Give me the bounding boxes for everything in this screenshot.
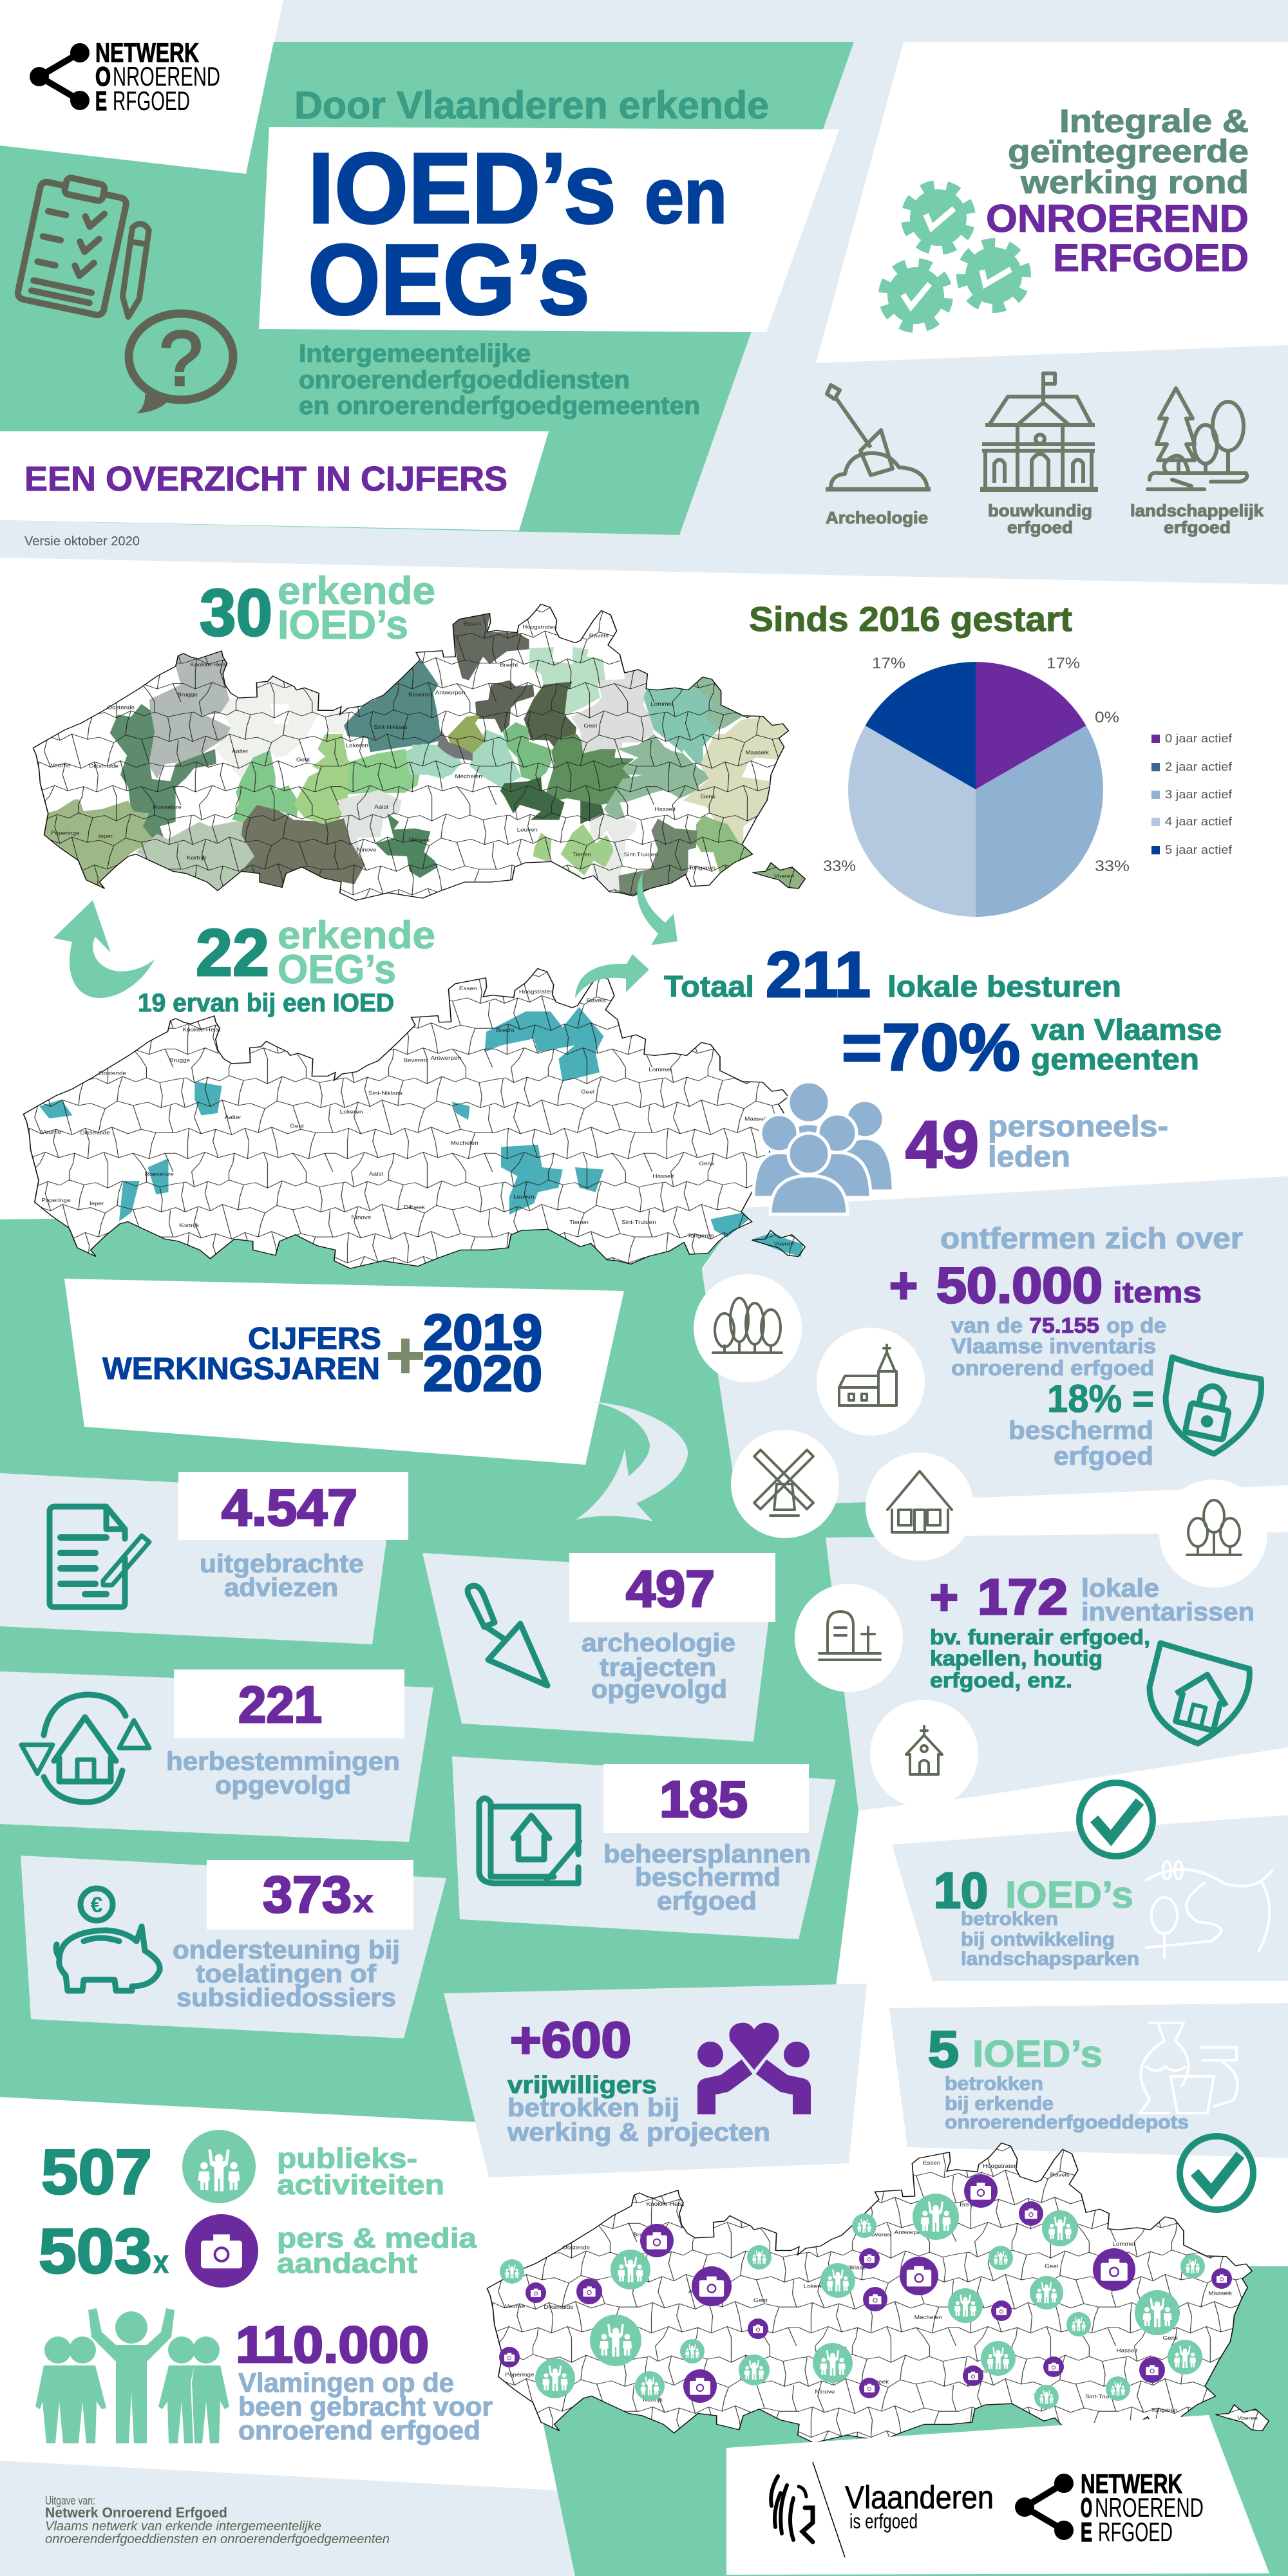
panel: 221 herbestemmingen: 221: [238, 1676, 322, 1733]
icon: pottery: [1140, 2023, 1238, 2113]
panel: 10 IOED's landschapsparken: IOED’s: [1005, 1874, 1133, 1916]
stat: 172 lokale inventarissen: bv. funerair erfgoed,: [930, 1625, 1150, 1649]
icon: shield with house: [1150, 1643, 1249, 1744]
text: ontfermen zich over 50.000 items: [889, 1221, 1243, 1471]
stat: 507 publieksactiviteiten: [41, 2130, 444, 2207]
chart legend: [1151, 732, 1233, 856]
icon: house with recycling arrows: [21, 1695, 149, 1802]
heading: sinds 2016 gestart: Sinds 2016 gestart: [749, 600, 1072, 639]
text: uitgave credits: Netwerk Onroerend Erfgoed: [45, 2505, 227, 2521]
panel: 497 archeologie: archeologie: [582, 1629, 735, 1657]
panel: green backdrop of cijfers section: [0, 1210, 902, 2122]
text: ontfermen zich over 50.000 items: Vlaamse inventaris: [951, 1334, 1156, 1358]
icon: document with pen: [50, 1507, 149, 1607]
stat: 507 publieksactiviteiten: publieks-: [277, 2143, 417, 2174]
stat: 70% van Vlaamse gemeenten: =70%: [842, 1010, 1020, 1084]
text: uitgave credits: onroerenderfgoeddiensten en onroerenderfgoedgemeenten: [45, 2532, 390, 2546]
text: erfgoed categories: [826, 501, 1264, 537]
text: ontfermen zich over 50.000 items: 18% =: [1047, 1377, 1154, 1420]
heading: 22 erkende OEG's: [138, 914, 435, 1017]
panel: 185 beheersplannen: [452, 1756, 836, 1939]
panel: 5 IOED's depots: 5: [928, 2020, 959, 2078]
panel: 185 beheersplannen: beschermd: [635, 1863, 781, 1892]
panel: 5 IOED's depots: onroerenderfgoeddepots: [945, 2112, 1189, 2133]
text: uitgave credits: Vlaams netwerk van erkende intergemeentelijke: [45, 2519, 321, 2534]
stat: 110.000 Vlamingen: Vlamingen op de: [238, 2367, 454, 2398]
panel: 10 IOED's landschapsparken: betrokken: [961, 1908, 1058, 1930]
panel: 373x ondersteuning: ondersteuning bij: [173, 1936, 400, 1964]
logo: Netwerk Onroerend Erfgoed bottom: NETWERK: [1081, 2468, 1182, 2499]
stat: 172 lokale inventarissen: erfgoed, enz.: [930, 1668, 1072, 1692]
panel: 5 IOED's depots: [889, 2003, 1288, 2158]
pins: pers en media: [499, 2174, 1232, 2403]
icon: check in ring: [1180, 2136, 1253, 2210]
text: integrale werking: geïntegreerde: [1008, 133, 1249, 169]
panel: 10 IOED's landschapsparken: [892, 1815, 1288, 1981]
icon: check in ring: [1079, 1783, 1153, 1856]
text: ontfermen zich over 50.000 items: 75.155: [1029, 1313, 1099, 1337]
stat: 172 lokale inventarissen: +: [930, 1568, 958, 1625]
icon: shield with lock: [1166, 1357, 1262, 1454]
panel: 185 beheersplannen: erfgoed: [657, 1887, 757, 1915]
stat: totaal 211 lokale besturen: 211: [766, 939, 871, 1011]
stat: 172 lokale inventarissen: inventarissen: [1081, 1598, 1255, 1626]
logo: Vlaanderen is erfgoed: [771, 2462, 994, 2557]
heading: een overzicht in cijfers: EEN OVERZICHT IN CIJFERS: [24, 460, 507, 498]
stat: 110.000 Vlamingen: 110.000: [236, 2316, 429, 2373]
arrow: curved up left: [53, 900, 155, 998]
heading: 22 erkende OEG's: OEG’s: [278, 947, 396, 992]
panel: 497 archeologie: [422, 1553, 775, 1742]
chart: pie sinds 2016 gestart: 0%: [1095, 709, 1119, 726]
text: erfgoed categories: landschappelijk: [1130, 501, 1264, 520]
title: IOED's en OEG's: IOED’s: [308, 133, 616, 245]
pins: publieksactiviteiten: [500, 2194, 1205, 2409]
panel: 221 herbestemmingen: opgevolgd: [215, 1771, 351, 1800]
text: uitgave credits: Uitgave van:: [45, 2494, 95, 2507]
stat: totaal 211 lokale besturen: Totaal: [664, 970, 754, 1003]
stat: totaal 211 lokale besturen: [664, 939, 1121, 1011]
title: IOED's en OEG's: [308, 133, 727, 336]
icon: bouwkundig erfgoed building: [980, 373, 1098, 489]
panel: 10 IOED's landschapsparken: bij ontwikkeling: [961, 1929, 1115, 1950]
icon circle: grave: [795, 1584, 903, 1692]
panel: logos white box: [726, 2415, 1269, 2575]
icon: pencil: [120, 223, 149, 318]
panel: cijfers werkingsjaren: [64, 1279, 624, 1465]
icon: landschappelijk erfgoed trees: [1148, 388, 1247, 489]
icon: people cheering: [35, 2308, 229, 2443]
map: activiteiten en pers: [480, 2138, 1278, 2446]
subtitle: intergemeentelijke diensten: Intergemeentelijke: [299, 340, 531, 368]
arrow: curved down right: [637, 871, 677, 945]
text: erfgoed categories: erfgoed: [1007, 518, 1073, 537]
panel: 221 herbestemmingen: [0, 1669, 433, 1842]
subtitle: intergemeentelijke diensten: en onroerenderfgoedgemeenten: [299, 392, 700, 420]
text: ontfermen zich over 50.000 items: ontfermen zich over: [940, 1221, 1243, 1255]
panel: lokale inventarissen backdrop: [826, 1532, 1288, 1810]
panel: main title white box: [259, 127, 839, 332]
icon: blueprint with house: [479, 1798, 580, 1883]
icon: group of people: [753, 1082, 893, 1214]
subtitle: intergemeentelijke diensten: onroerenderfgoeddiensten: [299, 366, 630, 394]
icon circle: church: [817, 1328, 925, 1436]
icon circle: chapel: [870, 1700, 978, 1808]
panel: 5 IOED's depots: bij erkende: [945, 2093, 1054, 2114]
stat: totaal 211 lokale besturen: lokale besturen: [887, 970, 1121, 1003]
panel: 600 vrijwilligers: +600: [510, 2011, 631, 2068]
text: ontfermen zich over 50.000 items: erfgoed: [1054, 1442, 1153, 1471]
logo: Netwerk Onroerend Erfgoed top: O: [95, 61, 111, 91]
logo: Netwerk Onroerend Erfgoed top: RFGOED: [113, 86, 190, 116]
panel: 10 IOED's landschapsparken: landschapsparken: [961, 1948, 1139, 1970]
chart: pie sinds 2016 gestart: 17%: [872, 655, 905, 672]
chart legend: 4 jaar actief: [1165, 815, 1233, 828]
panel: 600 vrijwilligers: werking & projecten: [507, 2118, 770, 2147]
logo: Netwerk Onroerend Erfgoed bottom: E: [1081, 2517, 1092, 2547]
panel: bottom-right green: [535, 2266, 1288, 2576]
panel: 373x ondersteuning: 373: [263, 1866, 352, 1923]
icon circle: trees: [694, 1274, 802, 1382]
stat: 503x pers en media: [39, 2214, 477, 2288]
chart: pie sinds 2016 gestart: 33%: [1095, 858, 1130, 875]
stat: 507 publieksactiviteiten: 507: [41, 2136, 152, 2207]
text: versie: Versie oktober 2020: [24, 534, 140, 549]
icon: clipboard with checklist: [17, 172, 129, 316]
panel: light blue items backdrop: [702, 1176, 1288, 1503]
heading: 22 erkende OEG's: 19 ervan bij een IOED: [138, 989, 394, 1017]
panel: 373x ondersteuning: toelatingen of: [196, 1960, 377, 1988]
logo: Netwerk Onroerend Erfgoed bottom: NROEREND: [1095, 2492, 1204, 2523]
logo: Netwerk Onroerend Erfgoed bottom: RFGOED: [1098, 2517, 1173, 2547]
text: ontfermen zich over 50.000 items: op de: [1106, 1313, 1166, 1337]
icon circle: house: [866, 1453, 974, 1561]
logo: Netwerk Onroerend Erfgoed top: NROEREND: [113, 61, 220, 91]
logo: Netwerk Onroerend Erfgoed top: NETWERK: [95, 37, 199, 68]
text: ontfermen zich over 50.000 items: onroerend erfgoed: [951, 1356, 1154, 1380]
panel: 373x ondersteuning: [21, 1856, 446, 2038]
panel: 5 IOED's depots: IOED’s: [972, 2033, 1103, 2075]
logo: Netwerk Onroerend Erfgoed top: [30, 37, 220, 116]
stat: 49 personeelsleden: 49: [905, 1107, 979, 1181]
panel: 185 beheersplannen: 185: [659, 1771, 748, 1828]
panel: 600 vrijwilligers: [444, 1984, 867, 2177]
icon: landscape road: [1146, 1861, 1272, 1957]
stat: 503x pers en media: 503: [39, 2215, 152, 2286]
chart legend: 2 jaar actief: [1165, 760, 1233, 773]
panel: cijfers werkingsjaren: CIJFERS: [248, 1322, 381, 1356]
stat: 70% van Vlaamse gemeenten: gemeenten: [1031, 1042, 1199, 1076]
title: IOED's en OEG's: en: [645, 152, 727, 240]
stat: 49 personeelsleden: personeels-: [988, 1109, 1168, 1143]
icon: hands holding heart: [697, 2023, 810, 2114]
chart legend: 5 jaar actief: [1165, 843, 1233, 856]
text: erfgoed categories: bouwkundig: [988, 501, 1092, 520]
title: IOED's en OEG's: OEG’s: [308, 224, 590, 336]
panel: 600 vrijwilligers: vrijwilligers: [507, 2072, 657, 2099]
heading: 30 erkende IOED's: 30: [200, 576, 272, 650]
heading: 30 erkende IOED's: erkende: [278, 569, 435, 612]
panel: 600 vrijwilligers: betrokken bij: [507, 2094, 679, 2122]
text: integrale werking: Integrale &: [1059, 103, 1249, 139]
heading: 22 erkende OEG's: erkende: [278, 914, 435, 957]
panel: cijfers werkingsjaren: 2019: [423, 1304, 542, 1360]
text: integrale werking: [986, 103, 1249, 279]
chart: pie sinds 2016 gestart: 33%: [823, 858, 856, 875]
stat: 70% van Vlaamse gemeenten: van Vlaamse: [1031, 1013, 1222, 1046]
stat: 507 publieksactiviteiten: activiteiten: [277, 2169, 444, 2201]
panel: integrale werking white box: [816, 42, 1288, 363]
stat: 70% van Vlaamse gemeenten: [842, 1010, 1222, 1084]
heading: 30 erkende IOED's: IOED’s: [278, 603, 408, 648]
text: ontfermen zich over 50.000 items: +: [889, 1257, 918, 1313]
subtitle: intergemeentelijke diensten: [299, 340, 700, 420]
stat: 503x pers en media: x: [153, 2244, 169, 2280]
logo: Netwerk Onroerend Erfgoed bottom: [1015, 2468, 1204, 2547]
logo: Vlaanderen is erfgoed: Vlaanderen: [845, 2479, 994, 2515]
stat: 49 personeelsleden: [905, 1107, 1168, 1181]
panel: overzicht white band: [0, 431, 549, 531]
stat: 110.000 Vlamingen: [236, 2316, 493, 2445]
stat: 503x pers en media: aandacht: [277, 2248, 417, 2279]
panel: 185 beheersplannen: beheersplannen: [603, 1840, 811, 1868]
chart: pie sinds 2016 gestart: 17%: [1046, 655, 1080, 672]
text: ontfermen zich over 50.000 items: items: [1113, 1275, 1202, 1309]
stat: 503x pers en media: pers & media: [277, 2223, 477, 2254]
panel: 373x ondersteuning: subsidiedossiers: [176, 1984, 396, 2012]
icon: piggy bank with euro: [56, 1888, 160, 1991]
panel: 497 archeologie: trajecten: [600, 1653, 716, 1682]
map: 22 erkende OEG's: [16, 963, 815, 1272]
text: ontfermen zich over 50.000 items: van de: [951, 1313, 1023, 1337]
text: ontfermen zich over 50.000 items: beschermd: [1009, 1416, 1153, 1445]
stat: 49 personeelsleden: leden: [988, 1140, 1070, 1173]
panel: bottom-left light blue: [0, 2461, 575, 2576]
arrow: curved to totaal: [575, 954, 649, 998]
panel: cijfers werkingsjaren: 2020: [423, 1345, 542, 1402]
panel: 5 IOED's depots: betrokken: [945, 2073, 1043, 2094]
panel: 4.547 adviezen: uitgebrachte: [200, 1550, 364, 1578]
stat: 110.000 Vlamingen: been gebracht voor: [238, 2391, 493, 2421]
icon: piggy bank with euro: €: [91, 1893, 103, 1917]
icon: question speech bubble: ?: [160, 315, 202, 402]
text: erfgoed categories: Archeologie: [826, 508, 928, 527]
icon: trowel: [468, 1586, 547, 1686]
chart legend: 0 jaar actief: [1165, 732, 1233, 745]
text: integrale werking: ERFGOED: [1053, 236, 1249, 279]
stat: 172 lokale inventarissen: [930, 1568, 1255, 1692]
panel: 10 IOED's landschapsparken: 10: [934, 1862, 988, 1919]
panel: top green title backdrop: [0, 42, 854, 535]
text: ontfermen zich over 50.000 items: 50.000: [936, 1257, 1103, 1313]
stat: 172 lokale inventarissen: kapellen, houtig: [930, 1646, 1103, 1670]
text: integrale werking: werking rond: [1020, 164, 1249, 200]
logo: Netwerk Onroerend Erfgoed bottom: O: [1081, 2492, 1092, 2523]
chart: pie sinds 2016 gestart: [823, 655, 1130, 917]
panel: 497 archeologie: opgevolgd: [591, 1675, 727, 1704]
arrow: light blue curved down: [575, 1402, 688, 1521]
heading: door Vlaanderen erkende: Door Vlaanderen erkende: [294, 84, 769, 127]
icon: question speech bubble: [129, 314, 233, 413]
panel: top light-blue backdrop: [0, 0, 1288, 585]
panel: 4.547 adviezen: [0, 1472, 408, 1644]
stat: 172 lokale inventarissen: 172: [978, 1568, 1068, 1625]
panel: 497 archeologie: 497: [626, 1560, 715, 1617]
panel: 221 herbestemmingen: herbestemmingen: [166, 1747, 400, 1776]
stat: 110.000 Vlamingen: onroerend erfgoed: [238, 2415, 480, 2445]
icon circle: windmill: [731, 1427, 839, 1538]
text: integrale werking: ONROEREND: [986, 197, 1249, 240]
logo: Vlaanderen is erfgoed: is erfgoed: [849, 2510, 918, 2533]
text: erfgoed categories: erfgoed: [1164, 518, 1231, 537]
heading: 30 erkende IOED's: [200, 569, 435, 650]
panel: 4.547 adviezen: adviezen: [224, 1574, 338, 1602]
logo: Netwerk Onroerend Erfgoed top: E: [95, 86, 107, 116]
panel: cijfers werkingsjaren: WERKINGSJAREN: [102, 1352, 380, 1386]
icon circle: small trees: [1159, 1480, 1267, 1588]
panel: 373x ondersteuning: x: [353, 1883, 374, 1919]
icon: archeologie shovel: [826, 385, 931, 489]
map: 30 erkende IOED's coloured: [26, 599, 814, 903]
chart legend: 3 jaar actief: [1165, 788, 1233, 801]
stat: 172 lokale inventarissen: lokale: [1081, 1574, 1159, 1603]
icon: three gears with checks: [881, 178, 1036, 330]
heading: 22 erkende OEG's: 22: [196, 916, 269, 990]
panel: 4.547 adviezen: 4.547: [222, 1479, 357, 1536]
text: uitgave credits: [45, 2494, 390, 2546]
